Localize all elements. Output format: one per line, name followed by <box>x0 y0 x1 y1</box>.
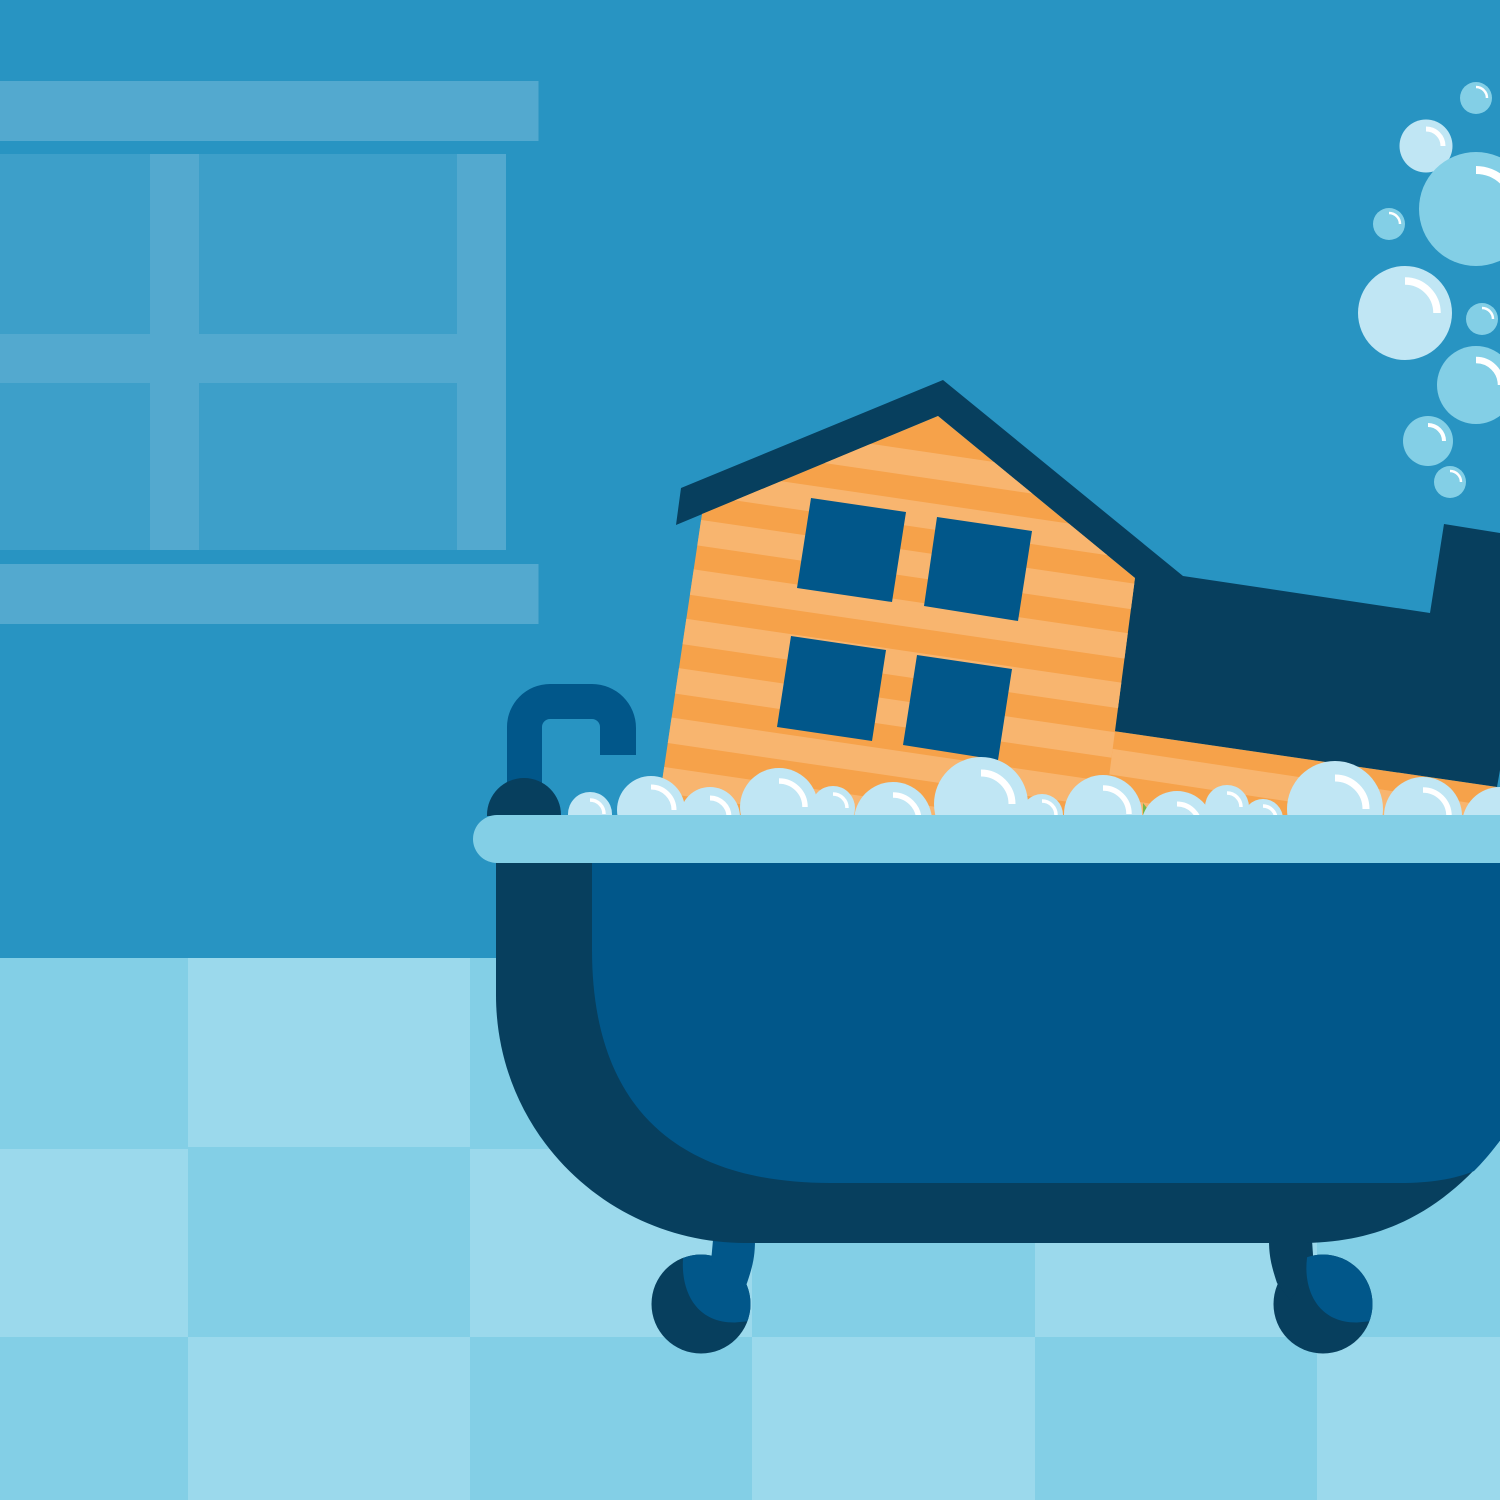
tap <box>507 684 636 800</box>
bathtub front panel <box>592 855 1500 1183</box>
window vertical mullion left <box>150 154 199 550</box>
right wheel <box>1274 1254 1372 1354</box>
window <box>0 81 538 624</box>
window bottom ledge <box>0 564 538 624</box>
rising bubbles <box>1358 82 1500 498</box>
house roof and dark wing <box>676 380 1500 787</box>
window horizontal mullion <box>0 334 457 383</box>
right wheel highlight <box>1306 1254 1372 1322</box>
wall background <box>0 0 1500 960</box>
house front wall <box>662 416 1135 815</box>
house side wing wall <box>1109 731 1497 815</box>
left leg <box>711 1240 755 1300</box>
left foot <box>652 1240 760 1354</box>
window panes <box>0 154 506 550</box>
window top ledge <box>0 81 538 141</box>
right foot <box>1269 1242 1372 1354</box>
bathtub rim <box>473 815 1500 863</box>
right leg <box>1269 1240 1314 1300</box>
bathtub body <box>496 855 1500 1243</box>
house windows <box>777 498 1032 760</box>
floor tiles <box>0 958 1500 1500</box>
tap knob <box>487 778 561 816</box>
left wheel <box>652 1254 750 1354</box>
foam bubbles <box>568 757 1500 815</box>
house <box>662 380 1500 815</box>
left wheel highlight <box>682 1254 750 1322</box>
window vertical mullion right <box>457 154 506 550</box>
